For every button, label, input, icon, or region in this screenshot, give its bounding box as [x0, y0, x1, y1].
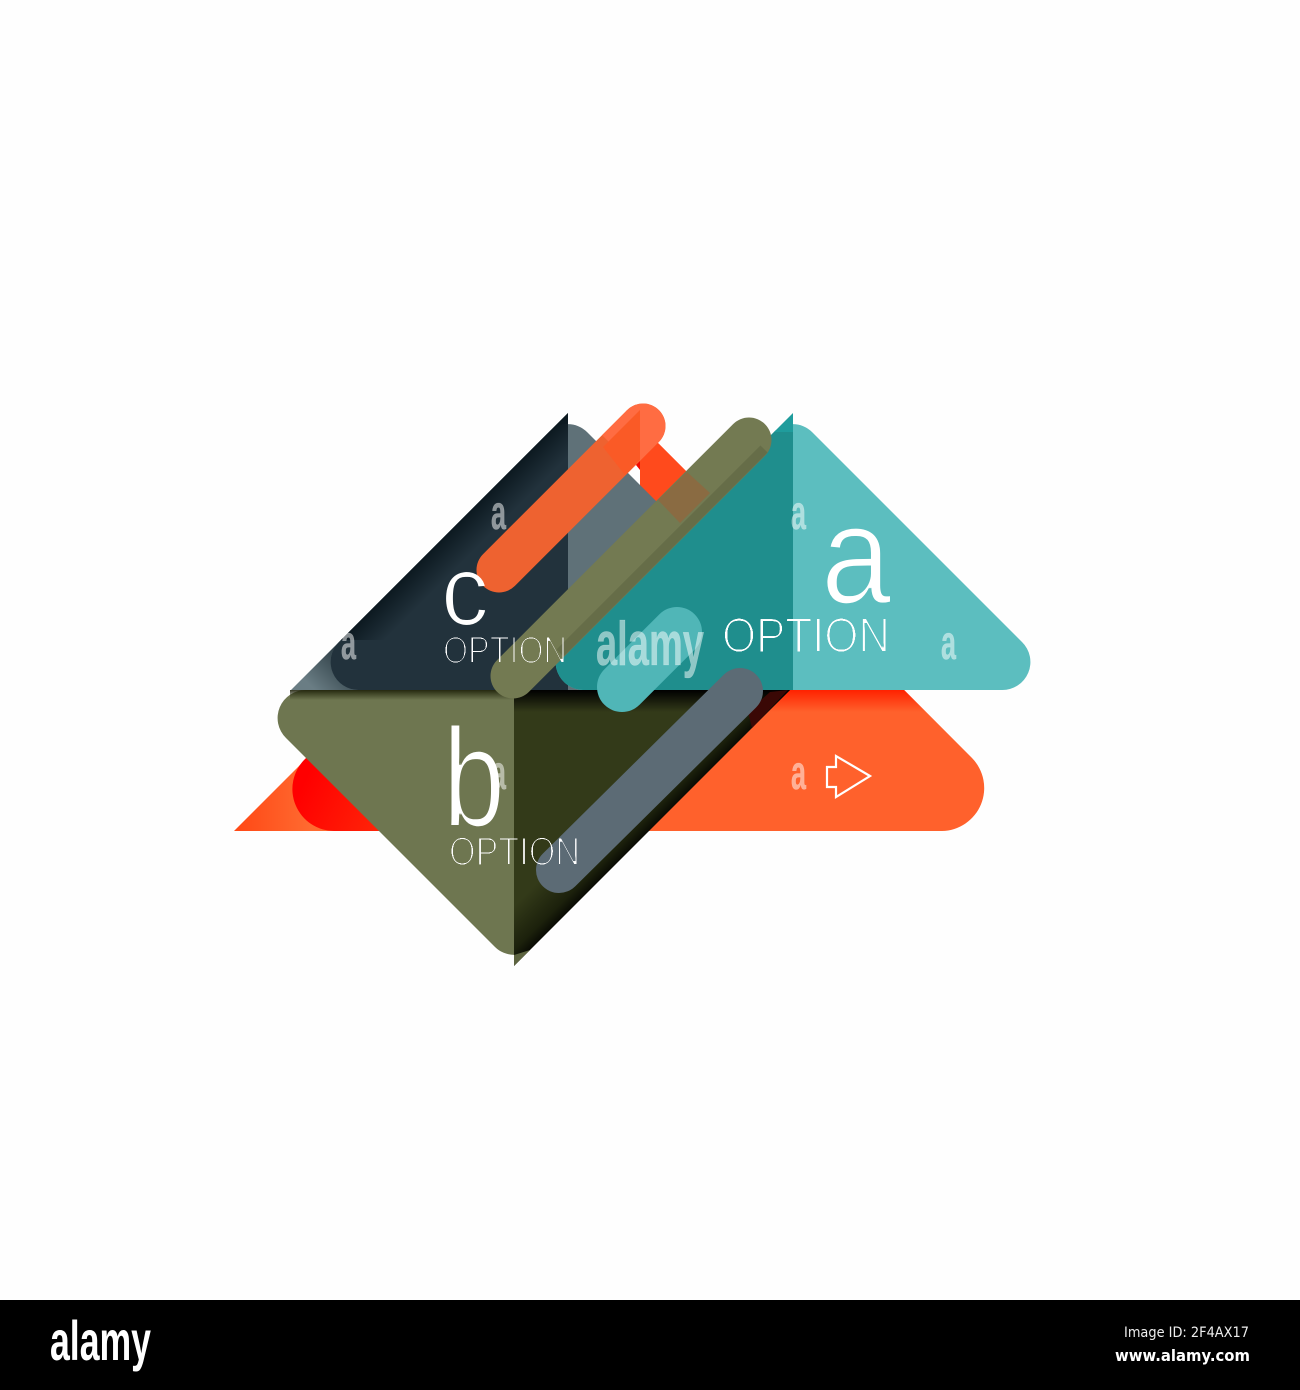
teal pill: [622, 632, 677, 687]
watermark: alamy: [596, 610, 704, 679]
panel: teal triangle a: [556, 413, 1030, 690]
watermark: a: [341, 617, 356, 670]
label: letter c with OPTION: [441, 535, 567, 672]
label: letter a with OPTION: OPTION: [722, 609, 890, 663]
footer bar: [0, 1300, 1300, 1390]
panel: olive triangle b: [278, 690, 790, 966]
watermark: [341, 487, 956, 800]
label: letter c with OPTION: c: [441, 535, 489, 647]
label: letter c with OPTION: OPTION: [443, 630, 567, 672]
image id: Image ID: 2F4AX17: [1124, 1325, 1249, 1341]
watermark: a: [491, 487, 506, 540]
watermark: a: [791, 487, 806, 540]
label: letter b with OPTION: [443, 699, 580, 874]
website: www.alamy.com: [1115, 1346, 1250, 1365]
panel: dark triangle c: [291, 413, 656, 690]
watermark: a: [491, 747, 506, 800]
orange pill: [499, 404, 666, 570]
icon: outline arrow: [827, 756, 870, 797]
label: letter b with OPTION: b: [443, 699, 505, 856]
olive pill: [513, 440, 764, 676]
label: letter a with OPTION: [722, 476, 891, 663]
label: letter b with OPTION: OPTION: [449, 830, 580, 874]
watermark: a: [791, 747, 806, 800]
label: letter a with OPTION: a: [821, 476, 891, 633]
watermark: a: [941, 617, 956, 670]
panel: orange triangle with arrow: [234, 425, 1046, 831]
footer logo: alamy: [50, 1309, 151, 1372]
gray pill: [559, 691, 740, 870]
